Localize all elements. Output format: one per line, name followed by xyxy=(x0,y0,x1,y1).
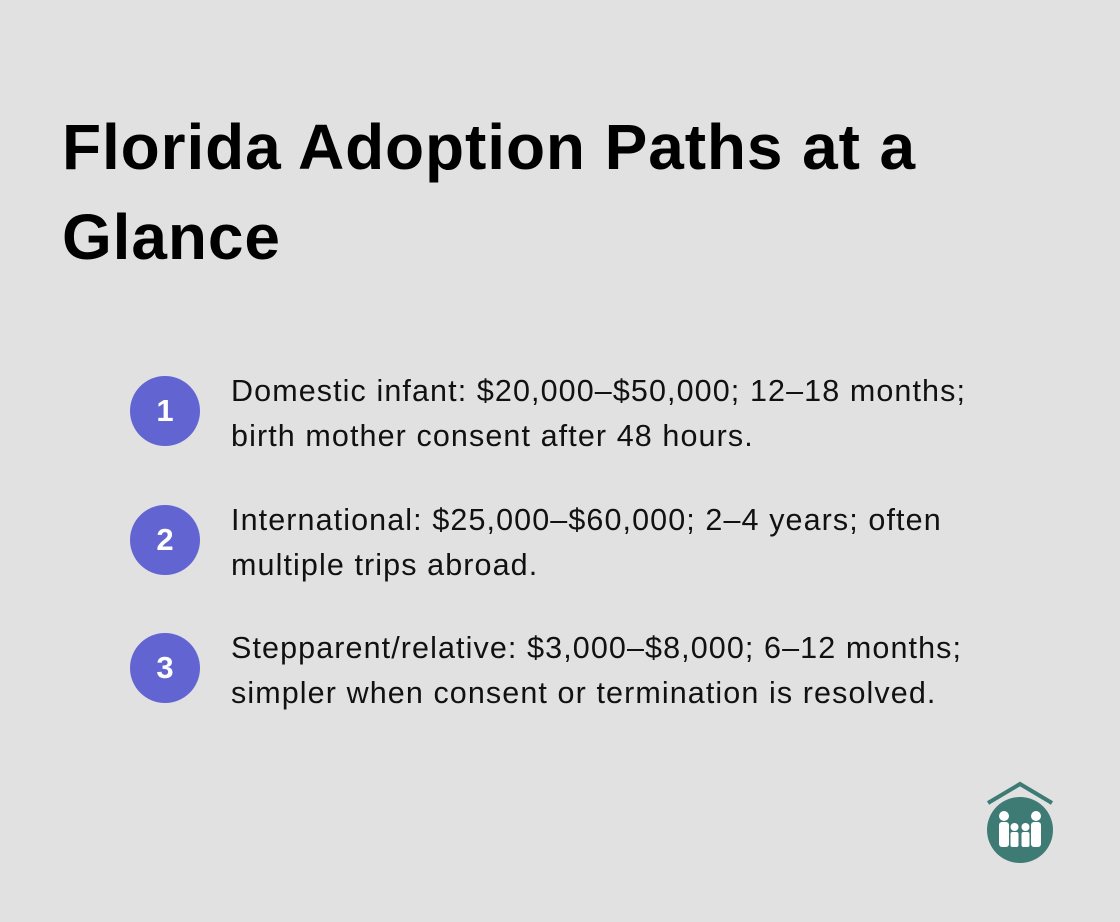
icon: logo house family xyxy=(987,782,1053,863)
item 3 xyxy=(130,631,962,710)
number badge 2: 2 xyxy=(156,522,174,557)
text 3: Stepparent/relative: $3,000–$8,000; 6–12 months; xyxy=(231,631,962,665)
title: Florida Adoption Paths at a xyxy=(62,111,916,183)
text 3 xyxy=(231,631,962,710)
text 2: International: $25,000–$60,000; 2–4 years; often xyxy=(231,503,942,537)
text 1 xyxy=(231,374,966,453)
item 1 xyxy=(130,374,966,453)
text 3: simpler when consent or termination is resolved. xyxy=(231,676,936,710)
number badge 3: 3 xyxy=(156,650,174,685)
number badge 1 xyxy=(130,376,200,446)
text 1: Domestic infant: $20,000–$50,000; 12–18 months; xyxy=(231,374,966,408)
text 2 xyxy=(231,503,942,582)
item 2 xyxy=(130,503,942,582)
text 2: multiple trips abroad. xyxy=(231,548,538,582)
title xyxy=(62,111,916,273)
number badge 1: 1 xyxy=(156,393,174,428)
number badge 3 xyxy=(130,633,200,703)
title: Glance xyxy=(62,201,281,273)
number badge 2 xyxy=(130,505,200,575)
text 1: birth mother consent after 48 hours. xyxy=(231,419,754,453)
